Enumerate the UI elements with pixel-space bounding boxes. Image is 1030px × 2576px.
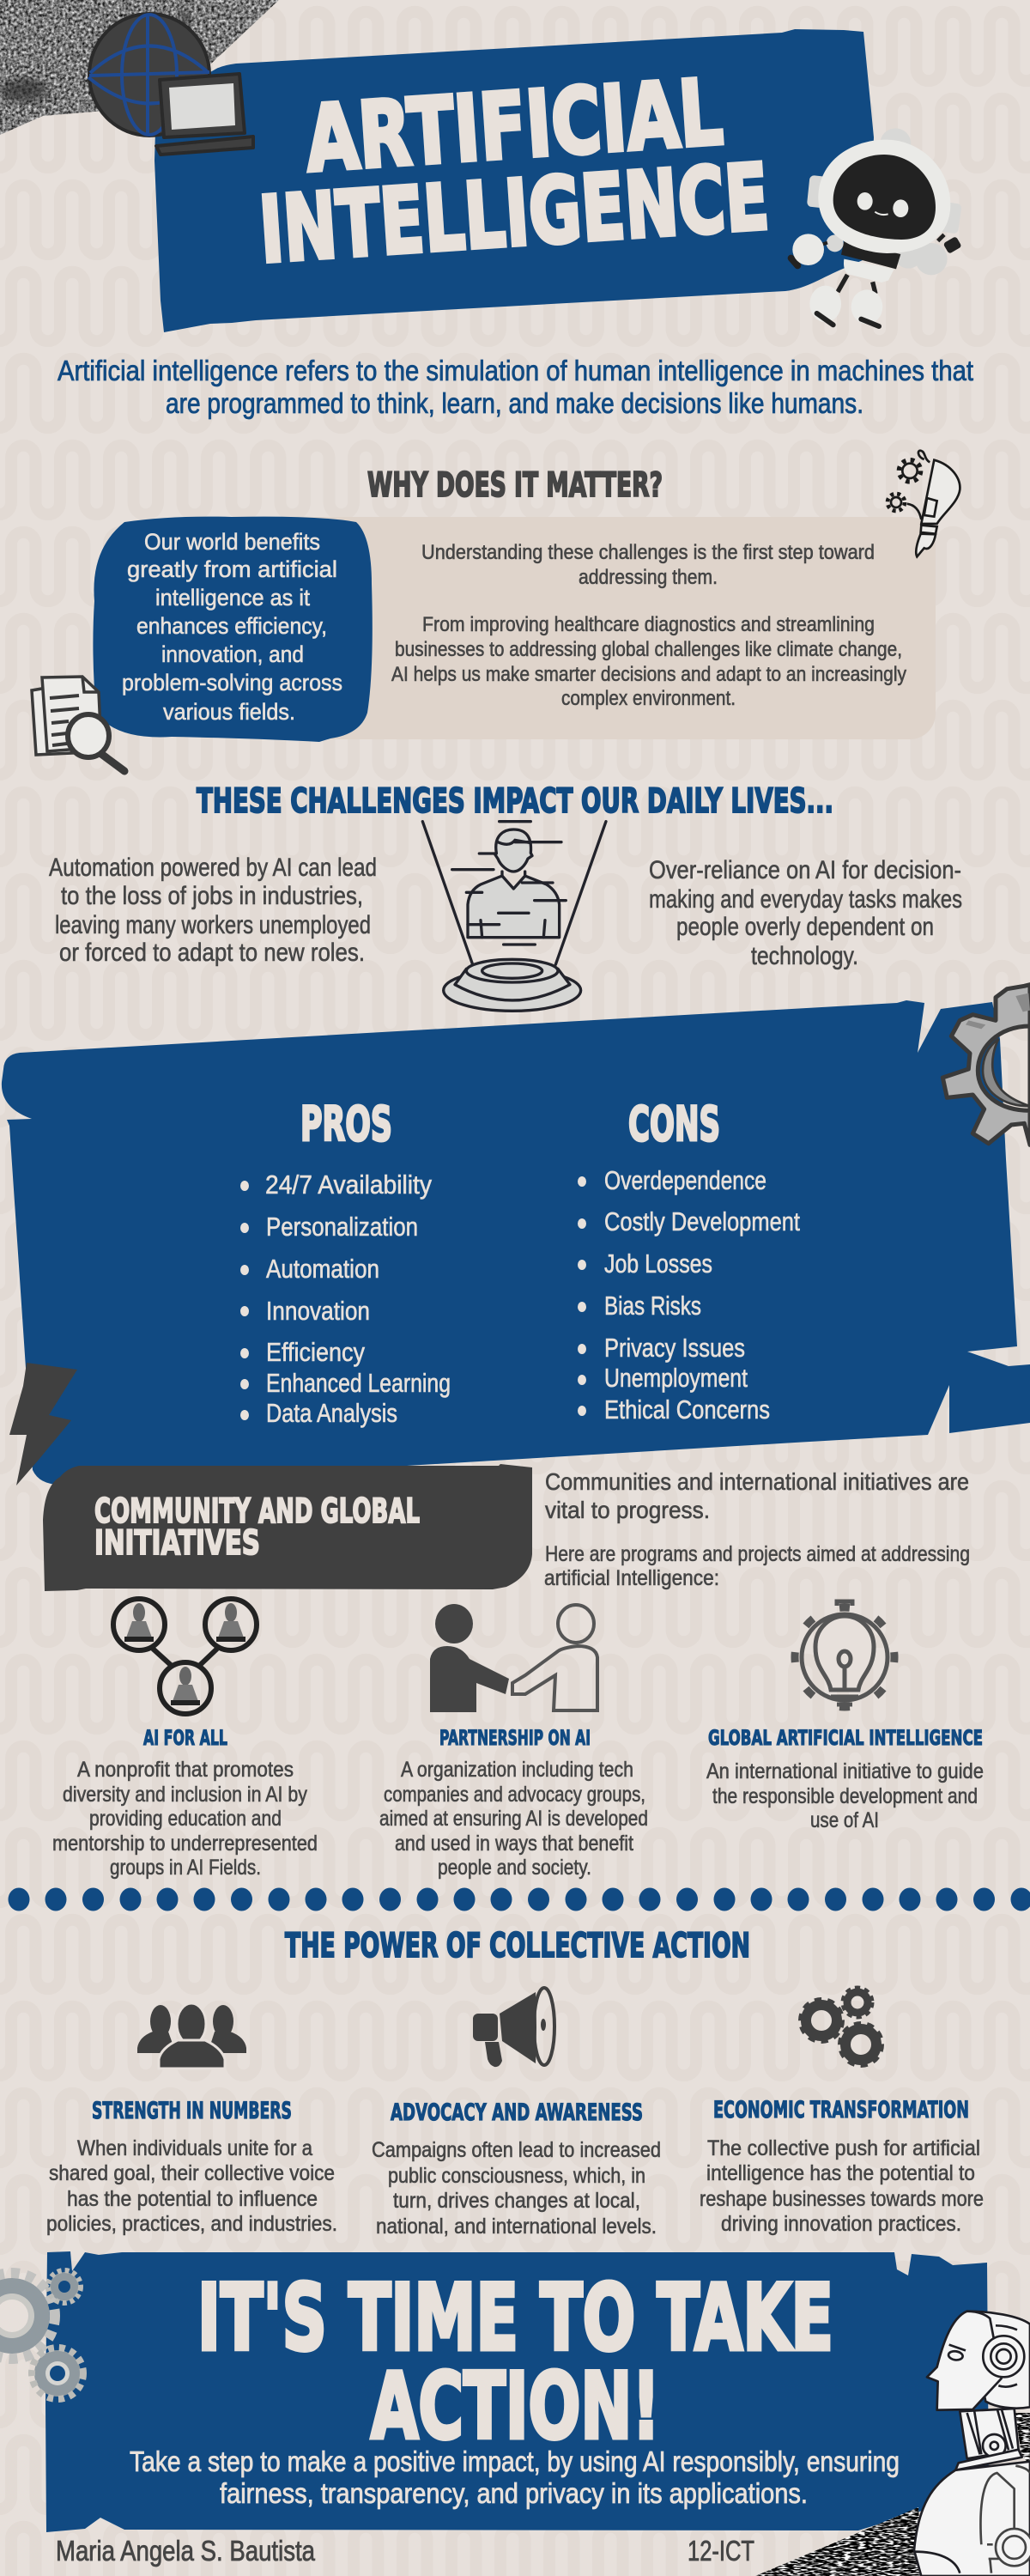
list: cons items: Bias Risks xyxy=(604,1291,701,1321)
credit: author: Maria Angela S. Bautista xyxy=(56,2535,316,2567)
heading: why does it matter: WHY DOES IT MATTER? xyxy=(367,466,663,505)
icon: gear lightbulb xyxy=(795,1601,894,1707)
text block: partnership on AI xyxy=(379,1758,648,1880)
list: pros items: Innovation xyxy=(266,1296,370,1326)
text block: strength in numbers: shared goal, their collective voice xyxy=(49,2161,335,2185)
text block: AI for all: groups in AI Fields. xyxy=(110,1856,261,1880)
panel: call to action xyxy=(45,2251,989,2532)
text block: AI for all: diversity and inclusion in AI by xyxy=(63,1783,307,1807)
text block: strength in numbers xyxy=(46,2136,337,2236)
title xyxy=(257,59,772,283)
text block: call to action: fairness, transparency, and privacy in its applications. xyxy=(220,2477,808,2509)
text block: over-reliance: technology. xyxy=(751,942,858,970)
text block: communities intro: artificial Intelligence: xyxy=(544,1566,719,1590)
heading: community and global initiatives: COMMUNITY AND GLOBAL xyxy=(94,1492,420,1531)
dotted divider xyxy=(9,1887,1030,1911)
list: cons items: Privacy Issues xyxy=(604,1333,745,1363)
panel: world benefits xyxy=(93,517,373,742)
text block: partnership on AI: A organization including tech xyxy=(401,1758,633,1782)
icon: laptop xyxy=(156,74,253,155)
icon: lightbulb with gears xyxy=(888,451,960,556)
text block: economic transformation: intelligence has the potential to xyxy=(706,2161,975,2185)
panel: pros and cons xyxy=(2,1000,1030,1485)
text block: strength in numbers: policies, practices, and industries. xyxy=(46,2212,337,2236)
text block: over-reliance: Over-reliance on AI for decision- xyxy=(649,856,961,884)
column: advocacy and awareness xyxy=(372,2099,661,2239)
icon: handshake xyxy=(430,1604,597,1712)
text block: automation: to the loss of jobs in industries, xyxy=(61,882,363,910)
text block: over-reliance xyxy=(649,856,962,970)
text block: world benefits: problem-solving across xyxy=(122,670,342,696)
column: partnership on AI xyxy=(379,1726,648,1880)
text block: understanding xyxy=(391,541,906,710)
column: global artificial intelligence xyxy=(706,1726,984,1832)
icon: gear xyxy=(942,985,1030,1145)
text block: world benefits: greatly from artificial xyxy=(127,556,337,582)
icon: gears left xyxy=(0,2270,83,2399)
panel: why it matters explanation xyxy=(258,517,936,739)
heading: community and global initiatives xyxy=(94,1492,420,1563)
text block: AI for all xyxy=(52,1758,318,1880)
list: pros items: Data Analysis xyxy=(266,1398,397,1428)
text block: automation: leaving many workers unemployed xyxy=(55,911,371,939)
text block: partnership on AI: and used in ways that benefit xyxy=(395,1832,633,1856)
text block: AI for all: providing education and xyxy=(89,1807,282,1831)
text block: understanding: addressing them. xyxy=(579,566,718,589)
text block: call to action xyxy=(130,2445,900,2509)
title: INTELLIGENCE xyxy=(257,144,772,283)
panel: title banner xyxy=(154,29,874,332)
list: pros items xyxy=(240,1170,451,1428)
text block: world benefits: enhances efficiency, xyxy=(136,613,327,639)
text block: economic transformation xyxy=(700,2136,984,2236)
icon: document with magnifier xyxy=(32,677,124,771)
text block: economic transformation: reshape businesses towards more xyxy=(700,2187,984,2211)
text block: understanding: Understanding these challenges is the first step toward xyxy=(421,541,875,564)
column: pros xyxy=(240,1097,451,1428)
column: strength in numbers xyxy=(46,2098,337,2236)
text block: automation: or forced to adapt to new roles. xyxy=(59,939,365,967)
icon: gears xyxy=(801,1988,882,2065)
text block: economic transformation: The collective push for artificial xyxy=(707,2136,980,2160)
text block: automation xyxy=(49,854,377,967)
text block: understanding: complex environment. xyxy=(561,687,736,710)
text block: automation: Automation powered by AI can lead xyxy=(49,854,377,882)
text block: global artificial intelligence: the responsible development and xyxy=(712,1784,978,1808)
text block: advocacy and awareness: turn, drives changes at local, xyxy=(393,2189,640,2213)
intro text: are programmed to think, learn, and make decisions like humans. xyxy=(166,387,863,419)
text block: global artificial intelligence: use of AI xyxy=(810,1808,879,1832)
text block: AI for all: A nonprofit that promotes xyxy=(77,1758,294,1782)
heading: community and global initiatives: INITIATIVES xyxy=(94,1524,260,1563)
intro text xyxy=(58,355,973,419)
heading: AI for all: AI FOR ALL xyxy=(143,1726,227,1750)
text block: understanding: From improving healthcare diagnostics and streamlining xyxy=(422,613,875,636)
heading: pros: PROS xyxy=(300,1097,392,1151)
icon: megaphone xyxy=(473,1988,554,2067)
text block: world benefits: various fields. xyxy=(163,699,295,725)
text block: advocacy and awareness: Campaigns often lead to increased xyxy=(372,2138,661,2162)
text block: world benefits: intelligence as it xyxy=(155,585,310,611)
icon: globe xyxy=(88,14,209,136)
icon: robot mascot xyxy=(791,128,962,326)
list: pros items: Personalization xyxy=(266,1212,418,1242)
list: cons items xyxy=(578,1165,800,1425)
text block: advocacy and awareness: public consciousness, which, in xyxy=(388,2164,645,2188)
text block: call to action: Take a step to make a positive impact, by using AI responsibly, ensuring xyxy=(130,2445,900,2477)
text block: partnership on AI: aimed at ensuring AI is developed xyxy=(379,1807,648,1831)
list: cons items: Ethical Concerns xyxy=(604,1394,770,1425)
text block: communities intro xyxy=(544,1468,970,1590)
text block: economic transformation: driving innovation practices. xyxy=(721,2212,961,2236)
list: cons items: Costly Development xyxy=(604,1206,800,1236)
text block: partnership on AI: companies and advocacy groups, xyxy=(384,1783,645,1807)
heading: cons: CONS xyxy=(628,1097,720,1151)
icon: humanoid robot xyxy=(914,2312,1030,2576)
text block: strength in numbers: When individuals unite for a xyxy=(77,2136,312,2160)
text block: global artificial intelligence xyxy=(706,1759,984,1832)
text block: advocacy and awareness xyxy=(372,2138,661,2239)
icon: hologram person xyxy=(422,822,606,1011)
list: pros items: Automation xyxy=(266,1254,379,1284)
list: cons items: Unemployment xyxy=(604,1363,748,1393)
heading: the power of collective action: THE POWER OF COLLECTIVE ACTION xyxy=(285,1927,750,1965)
grunge texture: bottom right xyxy=(755,2413,1030,2576)
text block: AI for all: mentorship to underrepresented xyxy=(52,1832,318,1856)
column: economic transformation xyxy=(700,2097,984,2236)
list: cons items: Job Losses xyxy=(604,1249,712,1279)
list: pros items: Enhanced Learning xyxy=(266,1368,451,1398)
text block: strength in numbers: has the potential to influence xyxy=(67,2187,318,2211)
column: AI for all xyxy=(52,1726,318,1880)
column: cons xyxy=(578,1097,800,1425)
text block: global artificial intelligence: An international initiative to guide xyxy=(706,1759,984,1783)
icon: people network xyxy=(113,1599,257,1714)
grunge texture: top left xyxy=(0,0,279,135)
text block: communities intro: vital to progress. xyxy=(545,1497,710,1523)
heading: strength in numbers: STRENGTH IN NUMBERS xyxy=(92,2098,292,2124)
text block: world benefits: innovation, and xyxy=(161,641,304,667)
text block: over-reliance: people overly dependent on xyxy=(676,913,934,941)
title: ARTIFICIAL xyxy=(303,59,726,192)
list: pros items: Efficiency xyxy=(266,1337,365,1367)
heading: it's time to take action xyxy=(197,2265,833,2459)
panel: community and global initiatives heading xyxy=(43,1464,532,1591)
credit: class: 12-ICT xyxy=(688,2535,754,2567)
text block: advocacy and awareness: national, and international levels. xyxy=(376,2215,657,2239)
icon: group of people xyxy=(137,2003,246,2069)
text block: communities intro: Communities and international initiatives are xyxy=(545,1468,969,1495)
heading: it's time to take action: ACTION! xyxy=(371,2354,660,2459)
text block: partnership on AI: people and society. xyxy=(438,1856,591,1880)
text block: world benefits xyxy=(122,529,342,725)
text block: understanding: AI helps us make smarter decisions and adapt to an increasingly xyxy=(391,663,906,686)
list: pros items: 24/7 Availability xyxy=(265,1170,432,1200)
text block: world benefits: Our world benefits xyxy=(144,529,320,555)
heading: partnership on AI: PARTNERSHIP ON AI xyxy=(439,1726,591,1750)
icon: lightning bolt xyxy=(9,1363,77,1485)
text block: understanding: businesses to addressing global challenges like climate change, xyxy=(395,638,902,661)
heading: advocacy and awareness: ADVOCACY AND AWARENESS xyxy=(391,2099,643,2126)
list: cons items: Overdependence xyxy=(604,1165,766,1195)
